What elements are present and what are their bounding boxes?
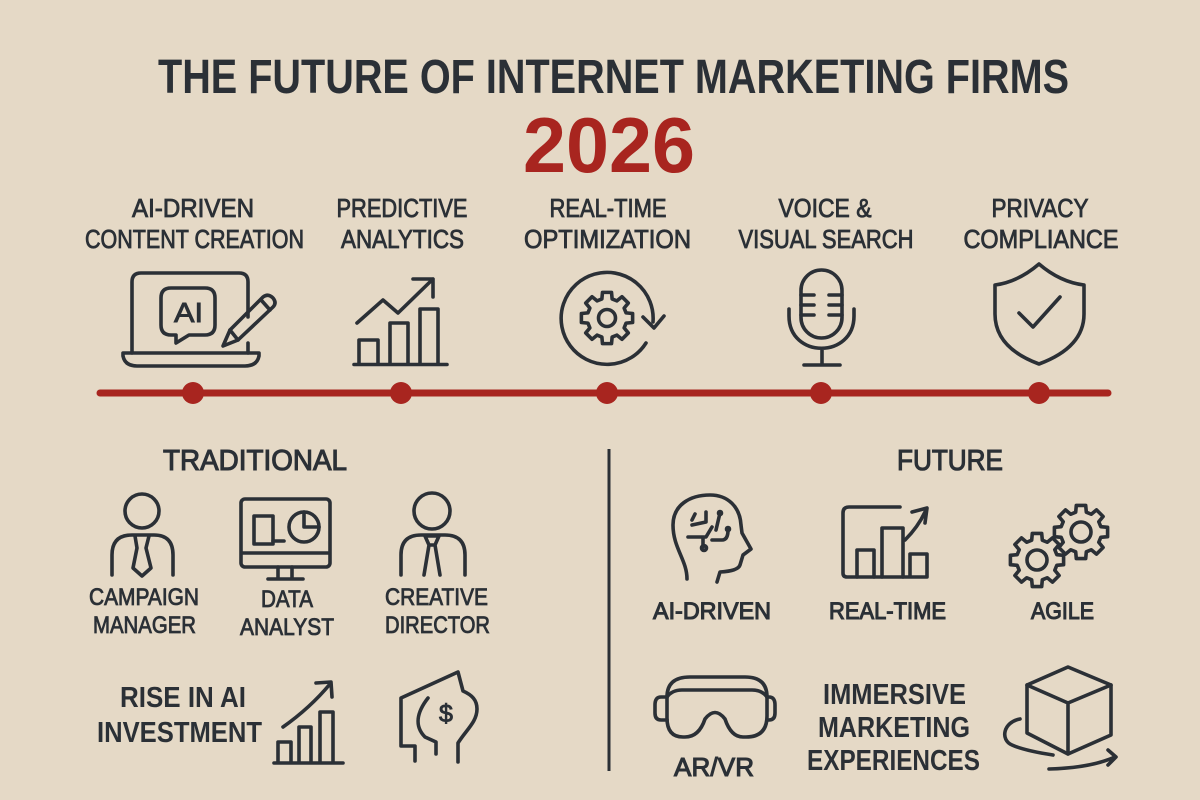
icon: data analyst monitor	[241, 499, 330, 579]
label: rise in AI: RISE IN AI	[120, 682, 246, 714]
label: AI-driven: AI-DRIVEN	[653, 598, 771, 625]
icon text: AI: AI	[174, 297, 203, 328]
heading: future: FUTURE	[897, 445, 1003, 477]
heading: visual search: VISUAL SEARCH	[738, 224, 914, 254]
label: experiences: EXPERIENCES	[807, 745, 980, 777]
label: agile: AGILE	[1031, 598, 1094, 625]
icon text: dollar: $	[439, 700, 453, 728]
icon: microphone	[789, 270, 854, 365]
heading: traditional: TRADITIONAL	[163, 445, 347, 477]
icon: money head	[401, 672, 477, 762]
heading: analytics: ANALYTICS	[341, 224, 464, 254]
icon: investment chart	[274, 682, 343, 763]
year: 2026	[523, 101, 695, 189]
heading: compliance: COMPLIANCE	[964, 224, 1118, 254]
icon: campaign manager	[112, 494, 173, 576]
heading: privacy: PRIVACY	[992, 193, 1088, 223]
label: immersive: IMMERSIVE	[823, 679, 966, 711]
label: AR/VR: AR/VR	[674, 752, 754, 782]
label: creative: CREATIVE	[385, 584, 488, 611]
icon: AI head	[673, 495, 751, 582]
heading: voice and: VOICE &	[778, 193, 872, 223]
divider	[608, 449, 610, 771]
heading: predictive: PREDICTIVE	[336, 193, 468, 223]
icon: gears	[1010, 505, 1108, 587]
heading: content creation: CONTENT CREATION	[85, 224, 304, 254]
icon: rising bar chart	[354, 279, 447, 364]
label: investment: INVESTMENT	[97, 717, 262, 749]
heading: AI-driven: AI-DRIVEN	[132, 193, 254, 223]
heading: optimization: OPTIMIZATION	[524, 224, 691, 254]
icon: AR/VR goggles	[655, 677, 775, 737]
icon: gear cycle	[561, 272, 664, 364]
label: campaign: CAMPAIGN	[89, 584, 199, 611]
icon: shield with check	[995, 264, 1084, 364]
label: marketing: MARKETING	[818, 712, 970, 744]
timeline	[100, 382, 1108, 404]
label: director: DIRECTOR	[385, 612, 490, 639]
icon: 3D cube with orbit arrow	[1005, 667, 1116, 769]
icon: real-time chart	[843, 507, 927, 577]
heading: real-time: REAL-TIME	[550, 193, 666, 223]
label: analyst: ANALYST	[240, 614, 334, 641]
label: data: DATA	[261, 586, 313, 613]
label: real-time: REAL-TIME	[829, 598, 946, 625]
label: manager: MANAGER	[93, 612, 196, 639]
icon: creative director	[401, 493, 465, 575]
icon: laptop with AI and pencil	[123, 273, 275, 366]
